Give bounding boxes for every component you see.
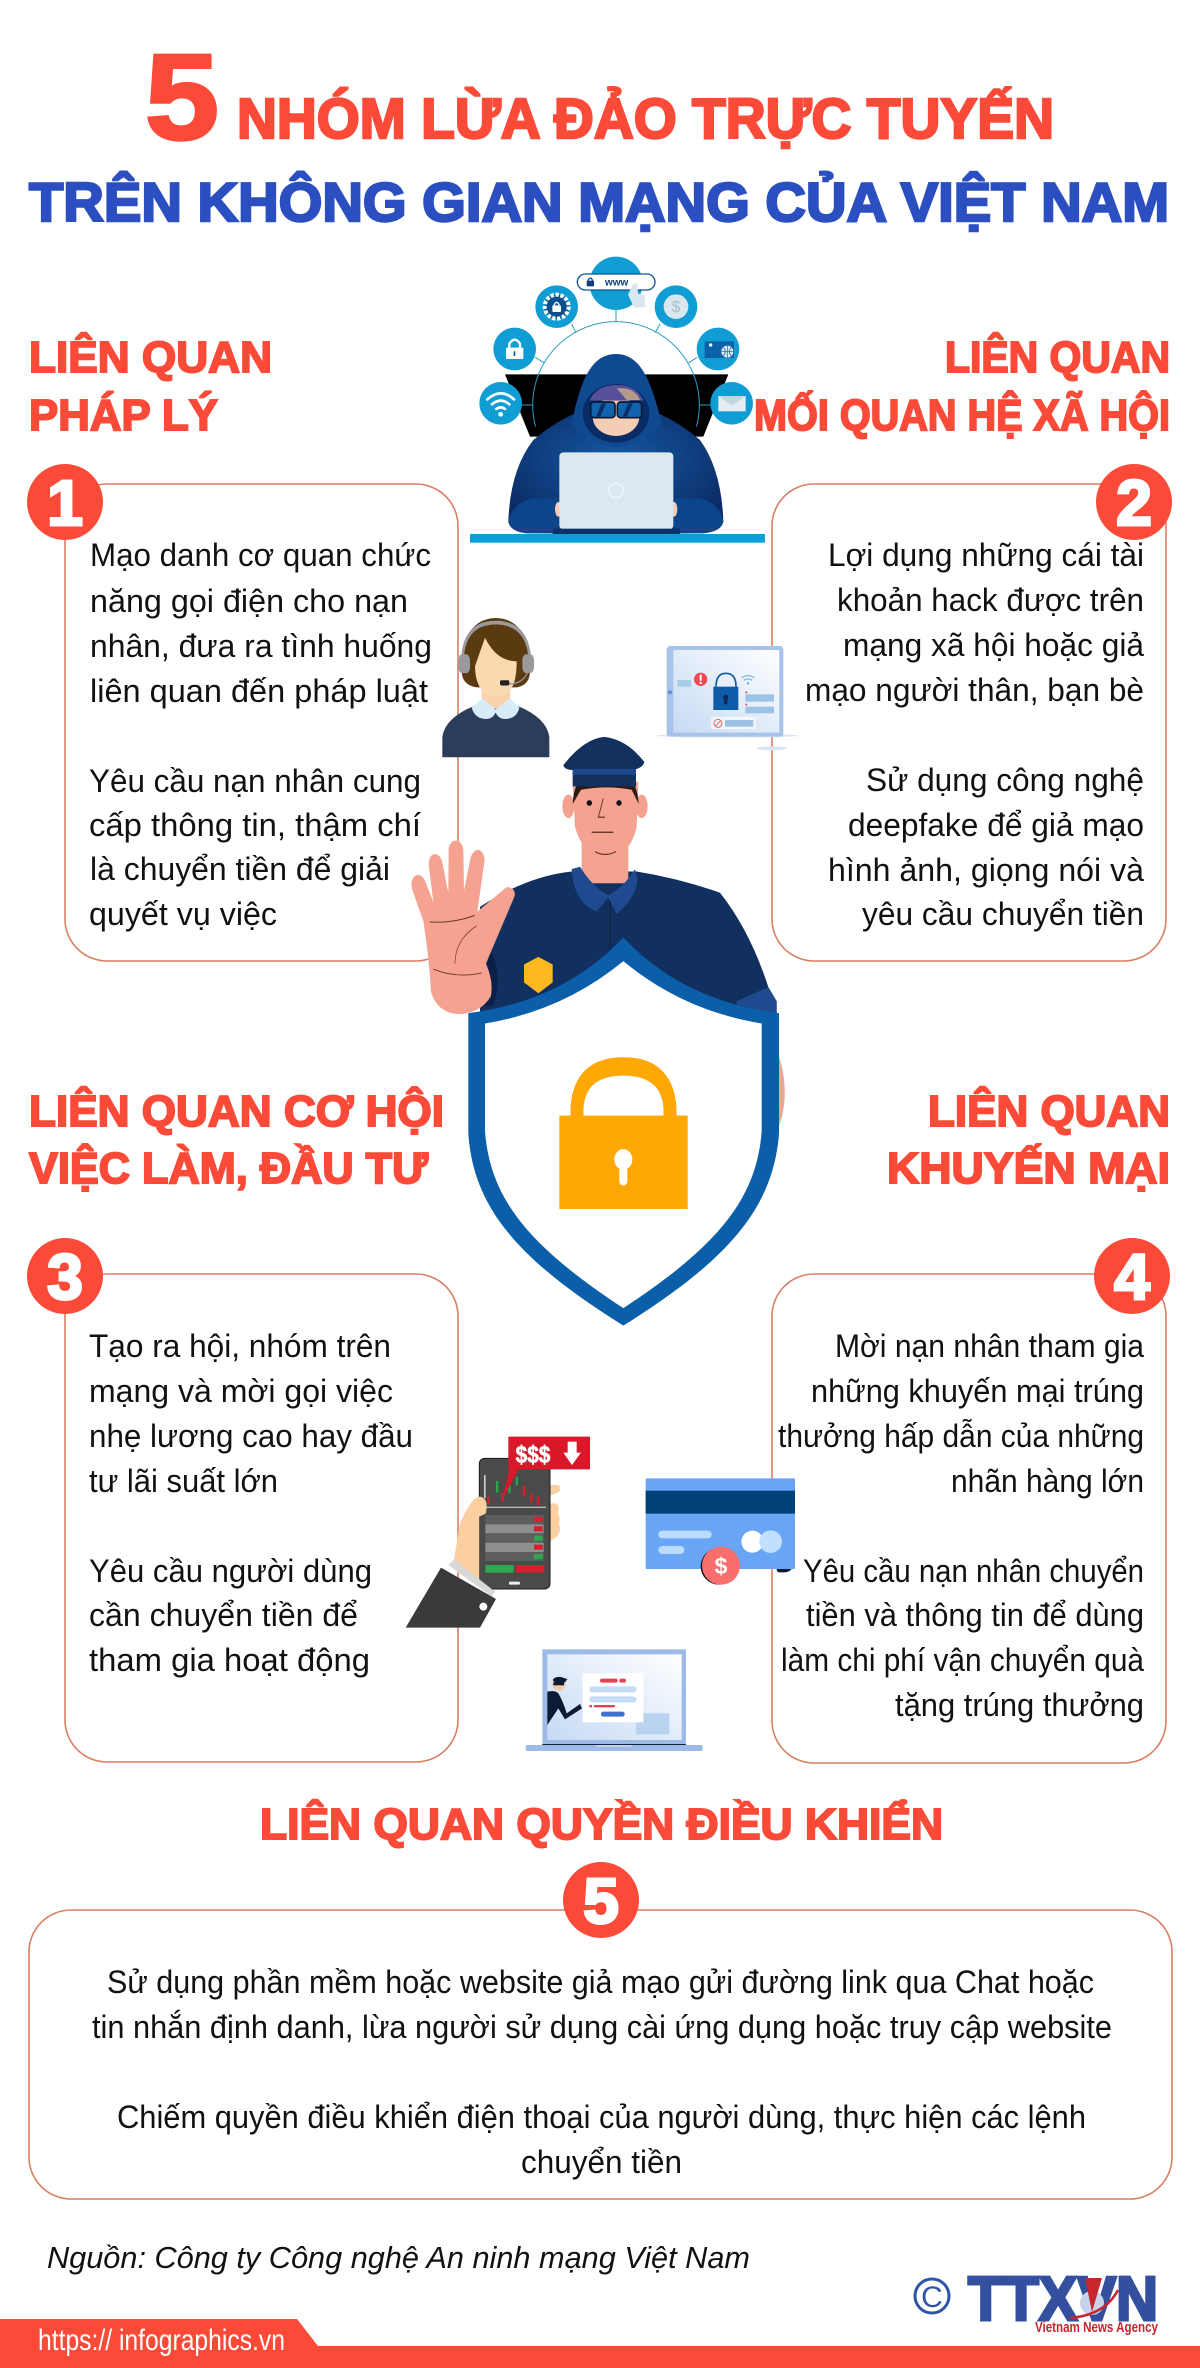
coin: $ (715, 1553, 728, 1579)
text: panel 5: tin nhắn định danh, lừa người sử dụng cài ứng dụng hoặc truy cập website (92, 2009, 1112, 2045)
text: panel 4 (778, 1328, 1144, 1723)
text: panel 2: Sử dụng công nghệ (866, 762, 1144, 798)
login form (583, 1673, 669, 1734)
panel 1: legal (65, 484, 458, 961)
text: panel 1: liên quan đến pháp luật (90, 673, 428, 709)
number badge 3 (27, 1238, 103, 1314)
laptop (559, 452, 673, 529)
text: panel 4: tiền và thông tin để dùng (806, 1597, 1144, 1633)
copyright symbol: C (921, 2281, 943, 2314)
raised hand (411, 841, 515, 1014)
text: panel 3: mạng và mời gọi việc (89, 1373, 393, 1409)
neck and face (562, 778, 648, 883)
title number 5: 5 (145, 29, 219, 165)
text: panel 1: Mạo danh cơ quan chức (90, 537, 431, 573)
far-side fingers (548, 1485, 560, 1543)
right arm (777, 1048, 785, 1126)
text: panel 4: nhãn hàng lớn (951, 1463, 1144, 1499)
phone body (479, 1458, 550, 1589)
text: panel 3: Yêu cầu người dùng (89, 1553, 372, 1589)
panel 2: social relationships (772, 484, 1166, 961)
number badge 3: 3 (47, 1241, 83, 1313)
text: panel 5: chuyển tiền (521, 2144, 682, 2180)
heading: group 3: LIÊN QUAN CƠ HỘI (29, 1085, 444, 1136)
heading: group 1 (29, 332, 272, 440)
chair (505, 374, 728, 437)
heading: group 3: VIỆC LÀM, ĐẦU TƯ (29, 1143, 428, 1193)
text: panel 2: yêu cầu chuyển tiền (862, 896, 1144, 932)
illustration: credit card (646, 1478, 795, 1585)
order rows (485, 1515, 544, 1585)
footer bar with URL: https:// infographics.vn (38, 2324, 285, 2357)
number badge 2 (1096, 464, 1172, 540)
text: panel 4: những khuyến mại trúng (811, 1373, 1144, 1409)
heading: group 3 (29, 1085, 444, 1193)
text: panel 1: năng gọi điện cho nạn (90, 583, 408, 619)
hacker body (508, 410, 723, 533)
panel 5: control (29, 1910, 1172, 2199)
text: panel 1: cấp thông tin, thậm chí (89, 807, 421, 843)
icon: www (577, 257, 655, 310)
number badge 4: 4 (1114, 1241, 1150, 1313)
heading: group 4: LIÊN QUAN (928, 1086, 1170, 1136)
coin (701, 1547, 740, 1585)
text: panel 2: mạng xã hội hoặc giả (843, 627, 1144, 663)
text: panel 4: Mời nạn nhân tham gia (835, 1328, 1144, 1364)
number badge 1: 1 (47, 467, 83, 539)
text: panel 3: tham gia hoạt động (89, 1642, 370, 1678)
desk (470, 534, 765, 543)
icon: dollar: $ (672, 299, 681, 316)
collar (572, 867, 637, 914)
illustration: locked tablet (657, 646, 799, 750)
chart (484, 1475, 546, 1508)
illustration: hacker behind laptop login (526, 1649, 703, 1751)
logo: TTXVN: TTXVN (968, 2265, 1158, 2334)
illustration: stock trading phone (406, 1437, 590, 1628)
text: panel 2: khoản hack được trên (837, 582, 1144, 618)
face (593, 397, 639, 436)
text: panel 2: Lợi dụng những cái tài (828, 537, 1144, 573)
text: panel 2: deepfake để giả mạo (848, 807, 1144, 843)
cuff (448, 1559, 495, 1597)
icon: wifi (479, 382, 522, 425)
icon: card and globe (697, 328, 739, 370)
network arc (514, 303, 718, 507)
text: panel 1 (89, 537, 432, 932)
text: panel 5 (92, 1964, 1112, 2180)
number badge 4 (1094, 1238, 1170, 1314)
text: panel 1: Yêu cầu nạn nhân cung (89, 763, 421, 799)
footer bar with URL (0, 2319, 1200, 2368)
sunglasses (591, 402, 642, 418)
sleeves and hands (508, 498, 560, 533)
illustration: hacker with network icons (470, 257, 765, 543)
text: panel 4: tặng trúng thưởng (895, 1687, 1144, 1723)
padlock (559, 1066, 688, 1209)
text: panel 2 (805, 537, 1144, 932)
icon: www: www (604, 278, 629, 289)
text: panel 3 (89, 1328, 413, 1678)
heading: group 1: PHÁP LÝ (29, 390, 218, 440)
red price alert: $$$ (516, 1441, 550, 1468)
heading: group 4: KHUYẾN MẠI (887, 1143, 1170, 1193)
badge (524, 957, 553, 993)
heading: group 2: LIÊN QUAN (945, 332, 1170, 382)
text: panel 4: làm chi phí vận chuyển quà (781, 1642, 1144, 1678)
text: panel 5: Chiếm quyền điều khiển điện thoại của người dùng, thực hiện các lệnh (117, 2099, 1086, 2135)
panel 3: jobs and investment (65, 1274, 458, 1762)
shield (468, 938, 779, 1326)
text: panel 1: là chuyển tiền để giải (90, 851, 390, 887)
text: panel 3: Tạo ra hội, nhóm trên (89, 1328, 391, 1364)
text: panel 2: mạo người thân, bạn bè (805, 672, 1144, 708)
uniform (480, 871, 777, 1020)
source: Nguồn: Công ty Công nghệ An ninh mạng Việt Nam (47, 2240, 750, 2275)
hood (572, 354, 662, 447)
text: panel 3: tư lãi suất lớn (89, 1463, 278, 1499)
illustration: police officer with shield (411, 737, 785, 1326)
illustration: call-centre agent (442, 618, 549, 757)
small hacker (547, 1677, 582, 1725)
heading: group 5: LIÊN QUAN QUYỀN ĐIỀU KHIỂN (260, 1798, 943, 1849)
heading: group 1: LIÊN QUAN (29, 332, 272, 382)
sleeve (406, 1568, 496, 1628)
number badge 5 (563, 1862, 639, 1938)
logo: TTXVN: Vietnam News Agency (1035, 2319, 1159, 2336)
panel 4: promotions (772, 1274, 1166, 1763)
heading: group 4 (887, 1086, 1170, 1193)
number badge 1 (27, 464, 103, 540)
police cap (563, 737, 644, 786)
text: panel 5: Sử dụng phần mềm hoặc website giả mạo gửi đường link qua Chat hoặc (107, 1964, 1094, 2000)
text: panel 4: thưởng hấp dẫn của những (778, 1418, 1144, 1454)
copyright symbol (915, 2279, 949, 2314)
number badge 5: 5 (583, 1865, 619, 1937)
title line 1: NHÓM LỪA ĐẢO TRỰC TUYẾN (237, 86, 1054, 151)
title (29, 29, 1169, 233)
text: panel 1: quyết vụ việc (89, 896, 277, 932)
text: panel 3: cần chuyển tiền để (89, 1597, 358, 1633)
text: panel 4: Yêu cầu nạn nhân chuyển (803, 1553, 1144, 1589)
icon: dollar (655, 285, 697, 328)
text: panel 1: nhân, đưa ra tình huống (90, 628, 432, 664)
heading: group 2 (754, 332, 1170, 440)
hand (453, 1497, 487, 1582)
icon: gear lock (535, 285, 578, 328)
title line 2: TRÊN KHÔNG GIAN MẠNG CỦA VIỆT NAM (29, 171, 1169, 233)
red price alert (502, 1437, 590, 1502)
icon: mail (710, 382, 753, 425)
text: panel 3: nhẹ lương cao hay đầu (89, 1418, 413, 1454)
number badge 2: 2 (1116, 467, 1152, 539)
text: panel 2: hình ảnh, giọng nói và (828, 852, 1144, 888)
icon: padlock (493, 328, 536, 370)
